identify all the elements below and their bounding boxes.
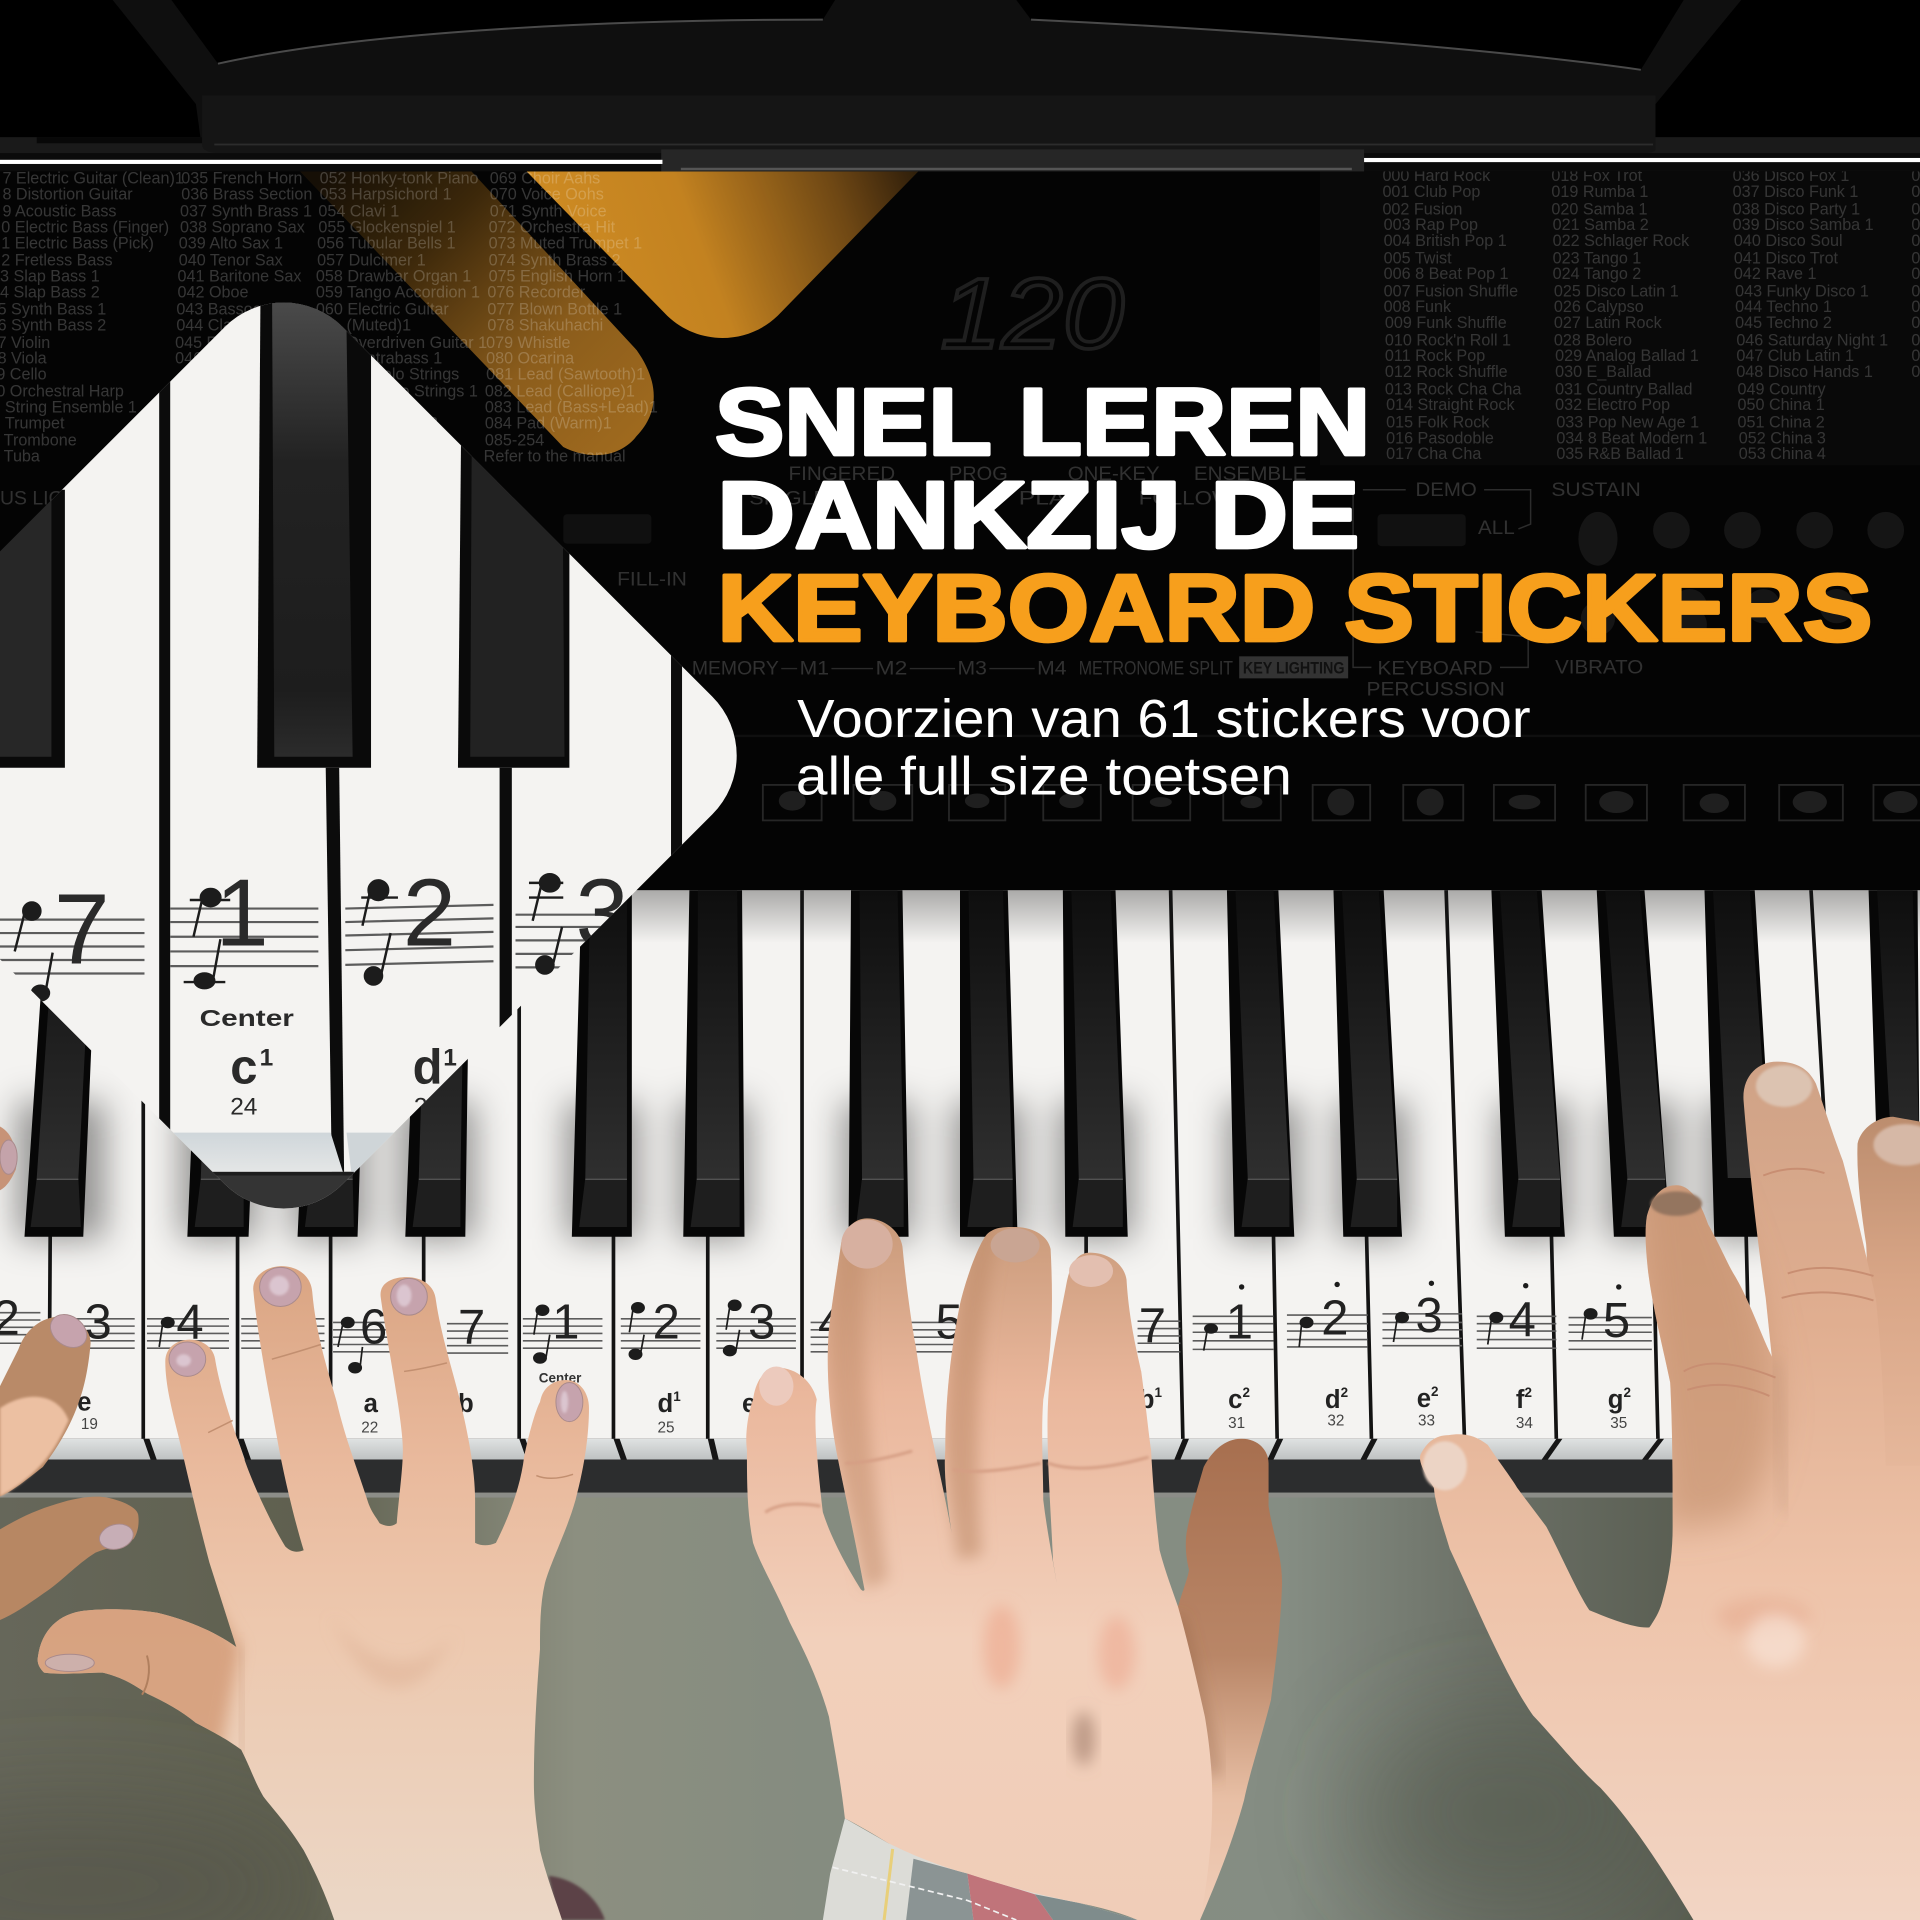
subheading: Voorzien van 61 stickers voor (797, 689, 1531, 749)
right style list: 026 Calypso (1554, 298, 1644, 316)
song and voice lists: Ensemble 2 (353, 415, 438, 433)
inset note names: 25 (414, 1093, 441, 1120)
right style list: 038 Disco Party 1 (1733, 200, 1860, 218)
right style list: 012 Rock Shuffle (1385, 363, 1508, 381)
right style list: 043 Funky Disco 1 (1735, 282, 1869, 300)
right style list: 052 China 3 (1739, 429, 1826, 447)
nails right hand (1423, 1065, 1920, 1490)
song and voice lists: 060 Electric Guitar (316, 301, 449, 319)
inset note names: 1 (260, 1044, 273, 1071)
song and voice lists: 059 Tango Accordion 1 (316, 284, 480, 302)
key dividers (49, 890, 1843, 1439)
sticker note names: d (658, 1390, 673, 1418)
sticker numerals: 1 (552, 1295, 579, 1349)
song and voice lists: 9 Acoustic Bass (2, 203, 117, 221)
right style list: 042 Rave 1 (1734, 265, 1817, 283)
sticker numerals: 1 (1226, 1295, 1253, 1349)
panel labels: PLAY (1019, 488, 1080, 509)
hand: right hand (1420, 1062, 1920, 1920)
panel labels: FINGERED (789, 464, 895, 485)
right style list: 045 Techno 2 (1735, 314, 1832, 332)
inset numerals: 2 (403, 860, 456, 966)
right style list: 022 Schlager Rock (1553, 232, 1690, 250)
key lighting tag: KEY LIGHTING (1243, 658, 1344, 677)
song and voice lists: 3 Slap Bass 1 (0, 268, 100, 286)
panel labels: KEYBOARD (1378, 659, 1493, 680)
panel labels (0, 464, 1643, 701)
sticker note names: 2 (1242, 1385, 1250, 1400)
music stand (0, 0, 1920, 171)
song and voice lists: 062 Contrabass 1 (315, 350, 442, 368)
right style list: 001 Club Pop (1382, 183, 1480, 201)
right style list: 031 Country Ballad (1555, 380, 1693, 398)
soft shadows of black keys (17, 1102, 1780, 1239)
song and voice lists: 082 Lead (Calliope)1 (485, 383, 635, 401)
sticker note names: c (1228, 1386, 1242, 1414)
sticker numerals: 2 (1321, 1292, 1348, 1346)
inset: zoomed sticker keys (0, 302, 737, 1208)
song and voice lists: 040 Tenor Sax (179, 252, 283, 270)
far left finger (0, 1316, 91, 1496)
inset numerals: 7 (54, 874, 110, 986)
right style list: 046 Saturday Night 1 (1736, 331, 1888, 349)
panel labels: M2 (876, 659, 907, 680)
sticker note names: d (1325, 1386, 1341, 1414)
headline: SNEL LEREN (715, 369, 1370, 474)
headline: DANKZIJ DE (718, 462, 1359, 567)
right style list: 019 Rumba 1 (1551, 183, 1648, 201)
sticker key numbers: 30 (1130, 1416, 1147, 1433)
sticker numerals: 7 (458, 1300, 485, 1354)
index finger tone (1635, 1176, 1785, 1531)
inset staves (0, 905, 661, 973)
song and voice lists: 081 Lead (Sawtooth)1 (486, 366, 645, 384)
right style list: 024 Tango 2 (1553, 265, 1641, 283)
song and voice lists: 061 Overdriven Guitar 1 (315, 334, 487, 352)
orange diagonal bar (300, 171, 654, 455)
right style list: 005 Twist (1384, 249, 1452, 267)
song and voice lists: 079 Whistle (486, 334, 571, 352)
panel labels: PROG (949, 464, 1008, 485)
right style list: 053 China 4 (1739, 445, 1826, 463)
sticker numerals: 5 (936, 1295, 963, 1349)
sticker note names: e (77, 1389, 91, 1417)
panel labels: ALL (1478, 518, 1515, 539)
right style list: 041 Disco Trot (1734, 249, 1839, 267)
right style list: 018 Fox Trot (1551, 167, 1643, 185)
right style list: 025 Disco Latin 1 (1554, 282, 1679, 300)
song and voice lists: 039 Alto Sax 1 (179, 235, 283, 253)
right style list: 044 Techno 1 (1735, 298, 1832, 316)
ring finger (1837, 1117, 1920, 1920)
right style list: 023 Tango 1 (1553, 249, 1641, 267)
panel labels: VIBRATO (1555, 657, 1643, 678)
right style list: 051 China 2 (1738, 413, 1825, 431)
sticker note names: 2 (1524, 1385, 1532, 1400)
nails left hand (0, 1140, 583, 1671)
song and voice lists: 037 Synth Brass 1 (180, 203, 312, 221)
song and voice lists: 2 Fretless Bass (1, 252, 113, 270)
thumb shading (38, 1606, 246, 1748)
sleeve cuff (823, 1818, 1138, 1920)
song and voice lists: 080 Ocarina (486, 350, 574, 368)
song and voice lists: 046 Piccolo (175, 350, 259, 368)
panel labels: M3 (958, 659, 987, 680)
inset note names: 1 (443, 1044, 457, 1071)
song and voice lists: 055 Glockenspiel 1 (318, 219, 456, 237)
song and voice lists: String Ensemble 1 (5, 399, 137, 417)
song and voice lists: 056 Tubular Bells 1 (317, 235, 455, 253)
song and voice lists: 036 Brass Section (181, 186, 312, 204)
song and voice lists: 8 Distortion Guitar (2, 186, 133, 204)
hand: middle hand (746, 1218, 1282, 1920)
right style list: 016 Pasodoble (1386, 429, 1494, 447)
song and voice lists: (Muted)1 (347, 317, 411, 335)
right style list: 021 Samba 2 (1553, 216, 1649, 234)
finger gap shadow (1884, 1347, 1888, 1469)
song and voice lists: 7 Electric Guitar (Clean)1 (2, 170, 184, 188)
panel labels: DEMO (1416, 480, 1477, 501)
hand silhouette (38, 1266, 589, 1920)
song and voice lists: 071 Synth Voice (490, 203, 607, 221)
song and voice lists: 5 Synth Bass 1 (0, 301, 106, 319)
right style list: 049 Country (1738, 380, 1826, 398)
panel labels: FILL-IN (617, 569, 687, 590)
song and voice lists (0, 170, 658, 466)
sticker numerals: 5 (1603, 1294, 1630, 1348)
white trim lines (0, 158, 1920, 164)
right style list: 032 Electro Pop (1555, 396, 1670, 414)
sticker key numbers: 34 (1516, 1415, 1533, 1432)
song and voice lists: Trombone (4, 432, 77, 450)
song and voice lists: 035 French Horn (181, 170, 302, 188)
sticker numerals: 2 (653, 1295, 680, 1349)
right style list: 000 Hard Rock (1382, 167, 1491, 185)
song and voice lists: 6 Synth Bass 2 (0, 317, 106, 335)
song and voice lists: 069 Choir Aahs (490, 170, 600, 188)
panel labels: PERCUSSION (1367, 680, 1505, 701)
panel labels: SINGLE (749, 488, 828, 509)
sticker note names: b (1139, 1386, 1154, 1414)
sticker key numbers: 33 (1418, 1412, 1435, 1429)
inset notes (15, 874, 563, 1000)
song and voice lists: 0 Orchestral Harp (0, 383, 124, 401)
song and voice lists: 043 Bassoon (176, 301, 271, 319)
inset white keys (0, 302, 737, 1208)
song and voice lists: 072 Orchestra Hit (489, 219, 616, 237)
panel labels: FOLLOW (1139, 488, 1233, 509)
right style list: 004 British Pop 1 (1384, 232, 1507, 250)
right style list: 003 Rap Pop (1384, 216, 1478, 234)
right style list: 020 Samba 1 (1551, 200, 1648, 218)
sticker note names: e (1417, 1385, 1431, 1413)
right style list: 017 Cha Cha (1386, 445, 1481, 463)
knuckle marks (983, 1605, 1020, 1689)
knuckle marks (1684, 1169, 1873, 1396)
song and voice lists: 057 Dulcimer 1 (317, 252, 426, 270)
panel labels: METRONOME SPLIT (1079, 659, 1233, 680)
song and voice lists: 078 Shakuhachi (487, 317, 603, 335)
headline (715, 369, 1872, 660)
sticker numerals: 3 (748, 1295, 775, 1349)
headline: KEYBOARD STICKERS (718, 555, 1872, 660)
song and voice lists: 077 Blown Bottle 1 (487, 301, 622, 319)
right style list: 008 Funk (1384, 298, 1452, 316)
keyboard (0, 890, 1920, 1498)
sticker key numbers: 19 (81, 1416, 98, 1433)
panel labels: US LIG (0, 488, 64, 509)
sticker numerals: 3 (84, 1295, 112, 1349)
panel labels: ENSEMBLE (1194, 464, 1307, 485)
nail flecks (176, 1276, 568, 1413)
sticker numerals: 4 (818, 1295, 845, 1349)
sticker numerals: 7 (1139, 1299, 1166, 1353)
sticker numerals: 3 (1416, 1289, 1443, 1343)
inset numerals (59, 878, 623, 964)
subheading: alle full size toetsen (796, 747, 1292, 807)
right style list: 040 Disco Soul (1734, 232, 1843, 250)
inset note names: c (230, 1041, 257, 1095)
panel labels: MEMORY (692, 659, 779, 680)
right style list: 015 Folk Rock (1386, 413, 1490, 431)
sticker note names: 2 (1341, 1385, 1348, 1400)
white keys (0, 890, 1920, 1439)
inset note names: d (413, 1041, 443, 1095)
floor behind keyboard (0, 1488, 1920, 1920)
right style list: 006 8 Beat Pop 1 (1384, 265, 1509, 283)
sticker numerals (0, 1289, 1630, 1354)
sticker key numbers: 32 (1327, 1412, 1344, 1429)
right style list: 050 China 1 (1738, 396, 1825, 414)
inset key gaps (159, 382, 682, 1172)
song and voice lists: Refer to the manual (484, 448, 626, 466)
thumb middle hand (1151, 1439, 1282, 1920)
inset black keys (0, 302, 570, 768)
song and voice lists: 063 Tremolo Strings (315, 366, 459, 384)
song and voice lists: 045 Flute (175, 334, 242, 352)
song and voice lists: 073 Muted Trumpet 1 (489, 235, 642, 253)
right style list: 002 Fusion (1382, 200, 1462, 218)
subheading (796, 689, 1531, 807)
finger creases (208, 1344, 573, 1478)
right style list: 010 Rock'n Roll 1 (1385, 331, 1511, 349)
right style list: 047 Club Latin 1 (1736, 347, 1854, 365)
right style list: 014 Straight Rock (1386, 396, 1515, 414)
icon row: percussion buttons (763, 785, 1920, 820)
right style list: 039 Disco Samba 1 (1733, 216, 1874, 234)
song and voice lists: 085-254 (485, 432, 544, 450)
sticker key numbers: 22 (361, 1420, 378, 1437)
panel labels: M1 (800, 659, 829, 680)
right style list: 033 Pop New Age 1 (1556, 413, 1699, 431)
key lips and front rail (0, 1439, 1920, 1498)
sticker key numbers (81, 1370, 1627, 1437)
sticker note names: g (1608, 1386, 1623, 1414)
right style list: 037 Disco Funk 1 (1733, 183, 1858, 201)
hand silhouette (1420, 1062, 1920, 1920)
sticker key numbers: 25 (658, 1420, 675, 1437)
black keys (24, 890, 1920, 1237)
tempo display: 120 (940, 258, 1124, 370)
inset key lips (174, 1132, 394, 1208)
song and voice lists: 083 Lead (Bass+Lead)1 (485, 399, 658, 417)
thumb edge shadow (1178, 1616, 1215, 1776)
sticker key numbers: Center (539, 1370, 582, 1385)
inset note names: Center (200, 1005, 294, 1031)
scrunchie (549, 1876, 605, 1920)
song and voice lists: 084 Pad (Warm)1 (485, 415, 612, 433)
song and voice lists: 075 English Horn 1 (489, 268, 626, 286)
control panel (0, 171, 1920, 894)
sticker note names: a (364, 1390, 379, 1418)
finger tone (828, 1224, 999, 1589)
song and voice lists: 052 Honky-tonk Piano (320, 170, 479, 188)
sticker note names: f (1516, 1386, 1524, 1414)
song and voice lists: 064 Pizzicato Strings 1 (313, 383, 478, 401)
sticker key numbers: 31 (1228, 1415, 1245, 1432)
song and voice lists: 4 Slap Bass 2 (0, 284, 100, 302)
memory connector lines (781, 668, 1035, 670)
right style list: 035 R&B Ballad 1 (1556, 445, 1684, 463)
right style list: 007 Fusion Shuffle (1384, 282, 1518, 300)
sticker note names (77, 1384, 1631, 1418)
inset numerals: 1 (216, 860, 269, 966)
song and voice lists: 041 Baritone Sax (178, 268, 302, 286)
right style list: 013 Rock Cha Cha (1385, 380, 1521, 398)
right style list: 027 Latin Rock (1554, 314, 1663, 332)
song and voice lists: 0 Electric Bass (Finger) (1, 219, 169, 237)
right style list: 011 Rock Pop (1385, 347, 1485, 365)
right style list: 048 Disco Hands 1 (1736, 363, 1873, 381)
sticker note names: 1 (673, 1389, 681, 1404)
hand: left child hand (0, 1127, 589, 1920)
song and voice lists: 044 Clarinet (176, 317, 264, 335)
orange triangle (527, 171, 918, 338)
song and voice lists: 1 Electric Bass (Pick) (1, 235, 154, 253)
sticker note names: e (742, 1390, 756, 1418)
sticker numerals: 4 (176, 1295, 204, 1349)
song and voice lists: Tuba (4, 448, 40, 466)
panel labels: ONE-KEY (1068, 464, 1160, 485)
song and voice lists: 042 Oboe (178, 284, 249, 302)
right style list (1382, 167, 1920, 463)
song and voice lists: 076 Recorder (487, 284, 586, 302)
inset note names: 24 (230, 1093, 257, 1120)
inset numerals: 3 (576, 860, 629, 966)
sticker key numbers: 35 (1610, 1415, 1627, 1432)
sticker note names: 2 (1431, 1384, 1439, 1399)
sticker notes (159, 1281, 1621, 1373)
sticker numerals: 4 (1509, 1293, 1536, 1347)
far left fingertip above (0, 1127, 16, 1190)
song and voice lists: 074 Synth Brass 2 (489, 252, 621, 270)
inset note names (200, 1005, 457, 1120)
sticker numerals: 6 (360, 1300, 387, 1354)
hand silhouette (746, 1218, 1212, 1920)
song and voice lists: 058 Drawbar Organ 1 (316, 268, 471, 286)
song and voice lists: 054 Clavi 1 (318, 203, 399, 221)
sticker note names: 2 (1623, 1385, 1631, 1400)
song and voice lists: Trumpet (5, 415, 65, 433)
right style list: 034 8 Beat Modern 1 (1556, 429, 1707, 447)
sticker note names: b (458, 1390, 474, 1418)
sticker staves (0, 1313, 1652, 1353)
second thumb at the left edge (0, 1497, 139, 1620)
knuckle shading (331, 1616, 453, 1688)
right style list: 036 Disco Fox 1 (1733, 167, 1849, 185)
sticker note names: 1 (1154, 1385, 1162, 1400)
right style list: 028 Bolero (1554, 331, 1632, 349)
nails middle hand (759, 1220, 1113, 1406)
song and voice lists: 070 Voice Oohs (490, 186, 604, 204)
right style list: 030 E_Ballad (1555, 363, 1651, 381)
right style list: 009 Funk Shuffle (1385, 314, 1507, 332)
panel labels: SUSTAIN (1551, 480, 1641, 501)
right style list: 029 Analog Ballad 1 (1555, 347, 1699, 365)
song and voice lists: 038 Soprano Sax (180, 219, 305, 237)
sticker numerals: 5 (268, 1295, 295, 1349)
panel labels: M4 (1037, 659, 1067, 680)
song and voice lists: 053 Harpsichord 1 (320, 186, 452, 204)
